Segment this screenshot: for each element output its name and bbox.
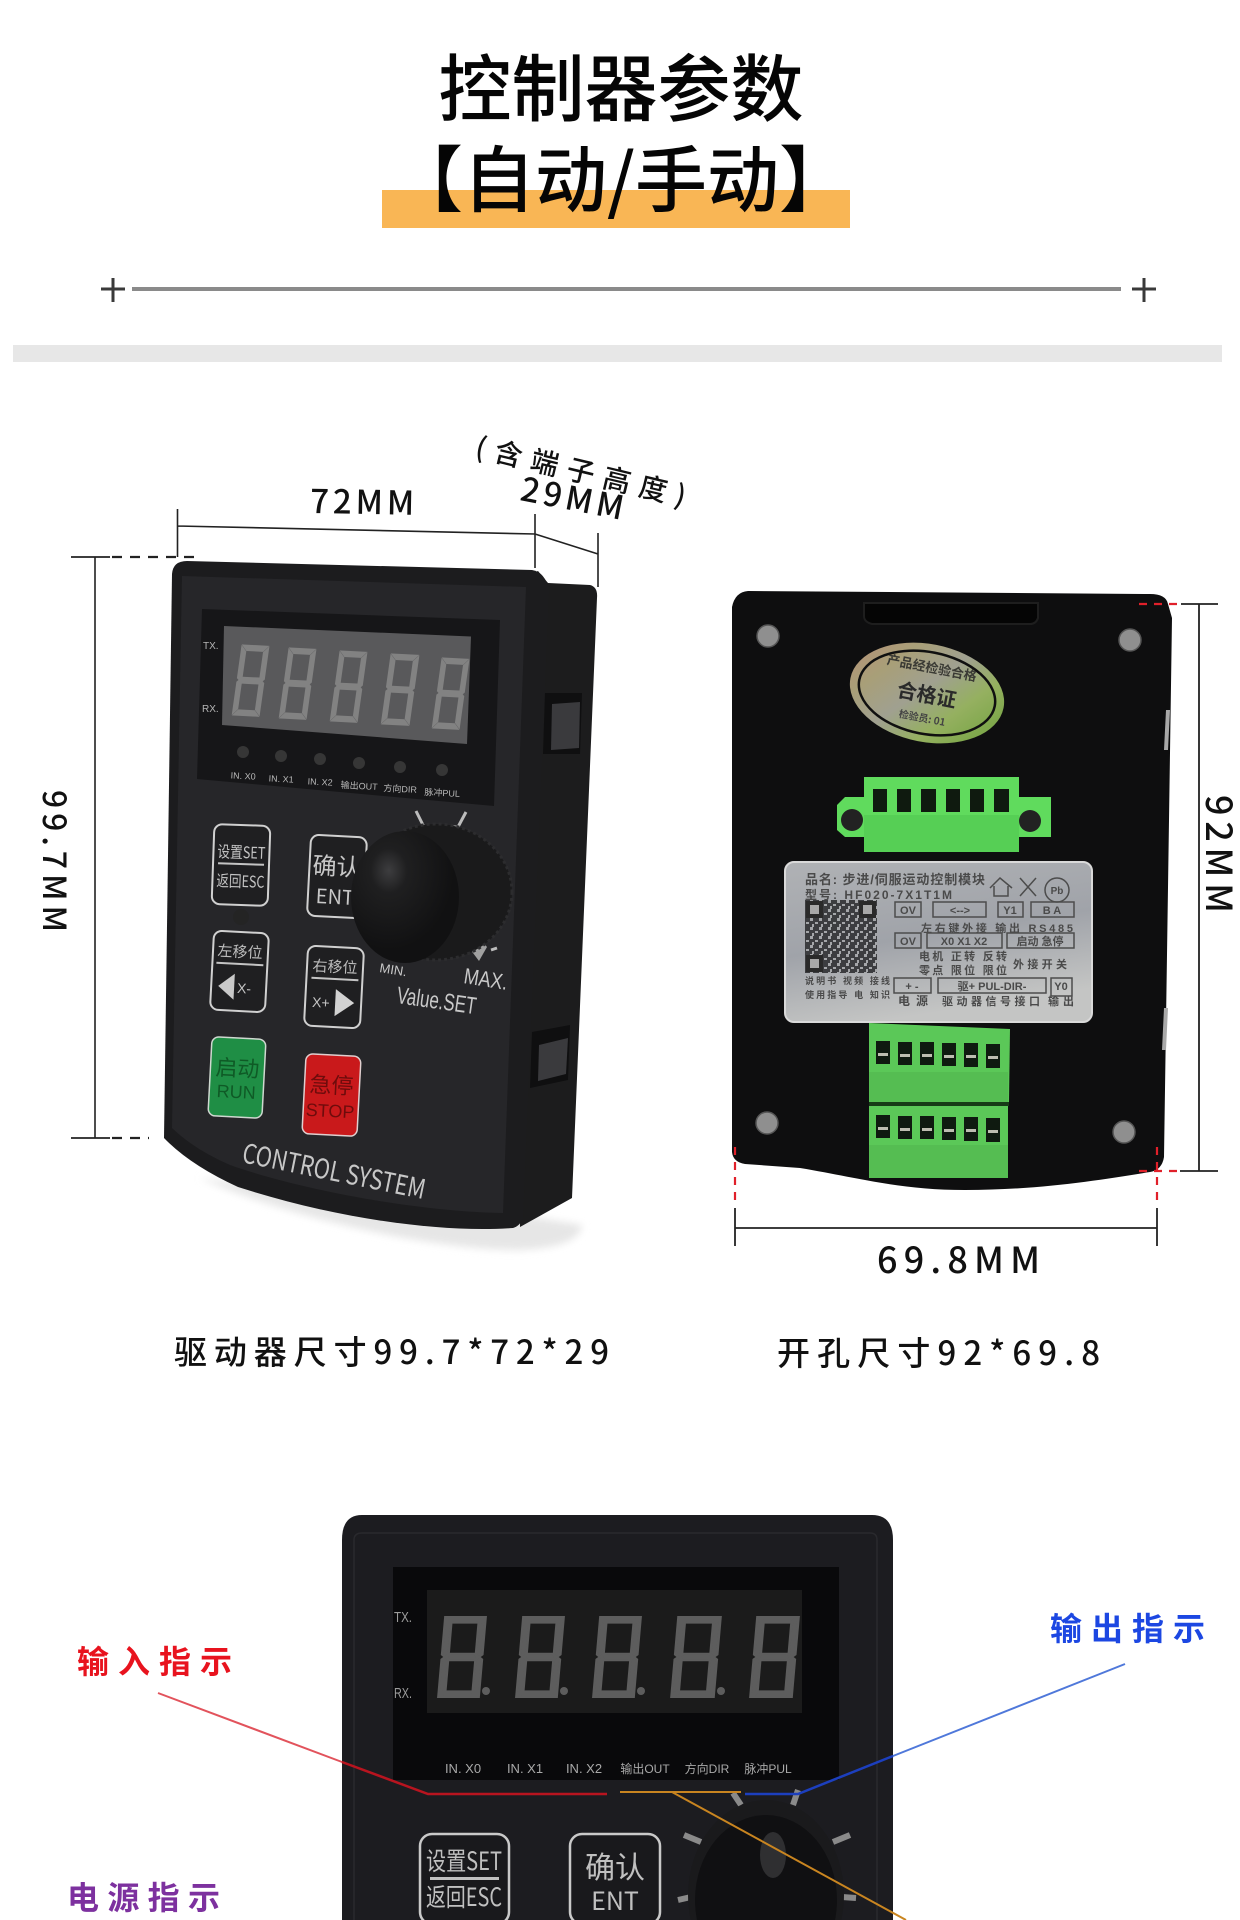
product label plate: 启动 急停 xyxy=(1016,934,1064,948)
closeup LED labels: 输出OUT xyxy=(620,1761,670,1776)
product label plate: 驱动器信号接口 xyxy=(942,994,1040,1008)
device side xyxy=(515,571,597,1227)
product label plate: 左右键外接 输出 RS485 xyxy=(921,921,1073,935)
dimension label: height note: (含端子高度) xyxy=(472,426,690,515)
side clip lower xyxy=(530,1025,570,1088)
indicator LEDs xyxy=(237,746,448,776)
knob labels: MAX. xyxy=(462,963,510,995)
button: stop: 急停 xyxy=(309,1067,354,1101)
closeup set button: 返回ESC xyxy=(426,1878,502,1914)
side clip upper xyxy=(543,693,582,754)
callout label: input: 输入指示 xyxy=(77,1637,232,1683)
button: right shift xyxy=(304,946,364,1028)
product label plate: 型号: HF020-7X1T1M xyxy=(805,888,952,902)
rear body xyxy=(732,591,1172,1190)
product label plate: <--> xyxy=(950,905,970,917)
button: run: 启动 xyxy=(215,1050,260,1084)
panel: front device xyxy=(164,561,597,1250)
product label plate: 说明书 视频 接线 xyxy=(805,975,890,986)
closeup LED labels: IN. X1 xyxy=(507,1761,543,1776)
closeup body xyxy=(342,1515,893,1920)
button: enter: 确认 xyxy=(312,846,361,883)
button: right shift: X+ xyxy=(312,994,330,1011)
product label plate: 电源 xyxy=(898,993,928,1008)
button: enter xyxy=(307,835,367,918)
closeup frame xyxy=(354,1533,877,1920)
button: run: RUN xyxy=(216,1081,256,1103)
LCD xyxy=(222,626,471,744)
knob cap xyxy=(351,831,459,963)
product label plate: Y0 xyxy=(1054,981,1068,993)
closeup LED labels xyxy=(445,1761,792,1776)
device shadow xyxy=(200,1178,582,1250)
certificate sticker: 检验员: 01 xyxy=(898,705,947,729)
title line 2: 【自动/手动】 xyxy=(391,122,851,227)
device face xyxy=(172,576,526,1213)
closeup LED labels: IN. X2 xyxy=(566,1761,602,1776)
dimension lines: rear device xyxy=(735,604,1218,1246)
closeup TX RX labels xyxy=(394,1609,412,1702)
closeup TX RX labels: RX. xyxy=(394,1685,412,1702)
closeup enter button: ENT xyxy=(591,1882,639,1918)
LED labels: 脉冲PUL xyxy=(424,786,460,799)
button: enter: ENT xyxy=(315,880,355,911)
closeup LED labels: IN. X0 xyxy=(445,1761,481,1776)
panel: indicator closeup xyxy=(342,1515,893,1920)
dimension lines: front device xyxy=(71,509,598,1138)
button: stop xyxy=(302,1054,361,1136)
TX RX labels: TX. xyxy=(203,641,219,652)
caption: driver size: 驱动器尺寸99.7*72*29 xyxy=(174,1326,609,1374)
LED labels xyxy=(230,770,460,799)
dimension label: 72MM: 72MM xyxy=(310,475,415,525)
TX RX labels: RX. xyxy=(202,704,219,715)
knob tick MAX xyxy=(470,935,487,961)
product label plate: 输出 xyxy=(1048,994,1074,1008)
knob labels: Value.SET xyxy=(395,982,478,1020)
certificate sticker: 合格证 xyxy=(895,674,959,713)
closeup decimal dots xyxy=(482,1687,725,1695)
button: set/esc: 返回ESC xyxy=(216,867,265,893)
rear edge highlight xyxy=(1162,710,1170,1050)
closeup LED labels: 脉冲PUL xyxy=(744,1761,792,1776)
brand text: CONTROL SYSTEM xyxy=(239,1132,429,1207)
divider with plus signs xyxy=(101,278,1156,302)
top green terminal xyxy=(837,777,1051,852)
QR code xyxy=(805,900,877,973)
callout line: power xyxy=(620,1792,906,1920)
callout label: power: 电源指示 xyxy=(67,1873,220,1919)
LED labels: 输出OUT xyxy=(340,779,378,792)
knob labels xyxy=(379,960,510,1020)
closeup digits xyxy=(438,1617,799,1697)
seven segment digits xyxy=(232,645,469,729)
button: left shift: X- xyxy=(237,980,252,997)
closeup enter button: 确认 xyxy=(585,1843,645,1887)
product label plate: 驱+ PUL-DIR- xyxy=(958,979,1027,993)
product label plate: OV xyxy=(900,936,917,948)
title xyxy=(382,31,851,228)
TX RX labels xyxy=(202,641,219,715)
product label plate: Pb xyxy=(1051,886,1063,897)
closeup LCD xyxy=(427,1590,802,1713)
product label plate: B A xyxy=(1043,905,1061,917)
title highlight bar xyxy=(382,190,850,228)
dimension label: 29MM: 29MM xyxy=(517,463,628,530)
product label plate xyxy=(785,862,1092,1022)
product label plate: 使用指导 电 知识 xyxy=(805,989,890,1000)
dimension label: 99.7MM: 99.7MM xyxy=(33,790,79,932)
product label plate: Y1 xyxy=(1003,905,1017,917)
product label plate: 零点 限位 限位 xyxy=(919,963,1007,977)
product label plate: 外接开关 xyxy=(1013,957,1067,971)
top notch xyxy=(864,603,1038,624)
closeup knob xyxy=(688,1800,844,1920)
dark display window xyxy=(197,609,500,806)
device face rim xyxy=(164,561,549,1229)
certificate sticker xyxy=(841,630,1013,756)
closeup TX RX labels: TX. xyxy=(394,1609,412,1626)
closeup knob ticks xyxy=(678,1790,856,1900)
button: set/esc: 设置SET xyxy=(217,838,266,864)
closeup LED labels: 方向DIR xyxy=(685,1761,730,1776)
product label plate: 电机 正转 反转 xyxy=(919,949,1007,963)
product label plate: OV xyxy=(900,905,917,917)
product label plate: 品名: 步进/伺服运动控制模块 xyxy=(805,872,985,887)
closeup enter button xyxy=(570,1834,660,1920)
grey band xyxy=(13,345,1222,362)
button: right shift: 右移位 xyxy=(312,955,358,978)
LED labels: 方向DIR xyxy=(383,782,418,795)
closeup set button xyxy=(420,1834,509,1920)
callout line: input xyxy=(158,1693,607,1794)
dimension label: 69.8MM: 69.8MM xyxy=(877,1232,1040,1284)
button: set/esc xyxy=(212,824,270,906)
caption: cutout size: 开孔尺寸92*69.8 xyxy=(777,1327,1100,1375)
lower green terminals xyxy=(869,1023,1010,1178)
knob scale ticks xyxy=(416,811,498,950)
product label plate: X0 X1 X2 xyxy=(941,936,987,948)
button: left shift xyxy=(210,931,269,1012)
rear screws xyxy=(756,625,1141,1143)
closeup dark window xyxy=(393,1567,839,1780)
button: left shift: 左移位 xyxy=(217,940,263,963)
power LED xyxy=(233,909,249,925)
LED labels: IN. X1 xyxy=(268,773,294,785)
LED labels: IN. X2 xyxy=(307,776,333,788)
closeup set button: 设置SET xyxy=(426,1842,502,1878)
callout label: output: 输出指示 xyxy=(1050,1604,1205,1650)
callout line: output xyxy=(745,1664,1125,1794)
certificate sticker: 产品经检验合格 xyxy=(886,649,979,685)
knob base xyxy=(360,824,512,960)
product label plate: + - xyxy=(905,981,919,993)
button: stop: STOP xyxy=(305,1100,355,1122)
panel: rear device xyxy=(67,591,1218,1920)
LED labels: IN. X0 xyxy=(230,770,256,782)
knob labels: MIN. xyxy=(379,960,408,979)
button: run xyxy=(208,1037,266,1118)
title line 1: 控制器参数 xyxy=(438,31,804,137)
